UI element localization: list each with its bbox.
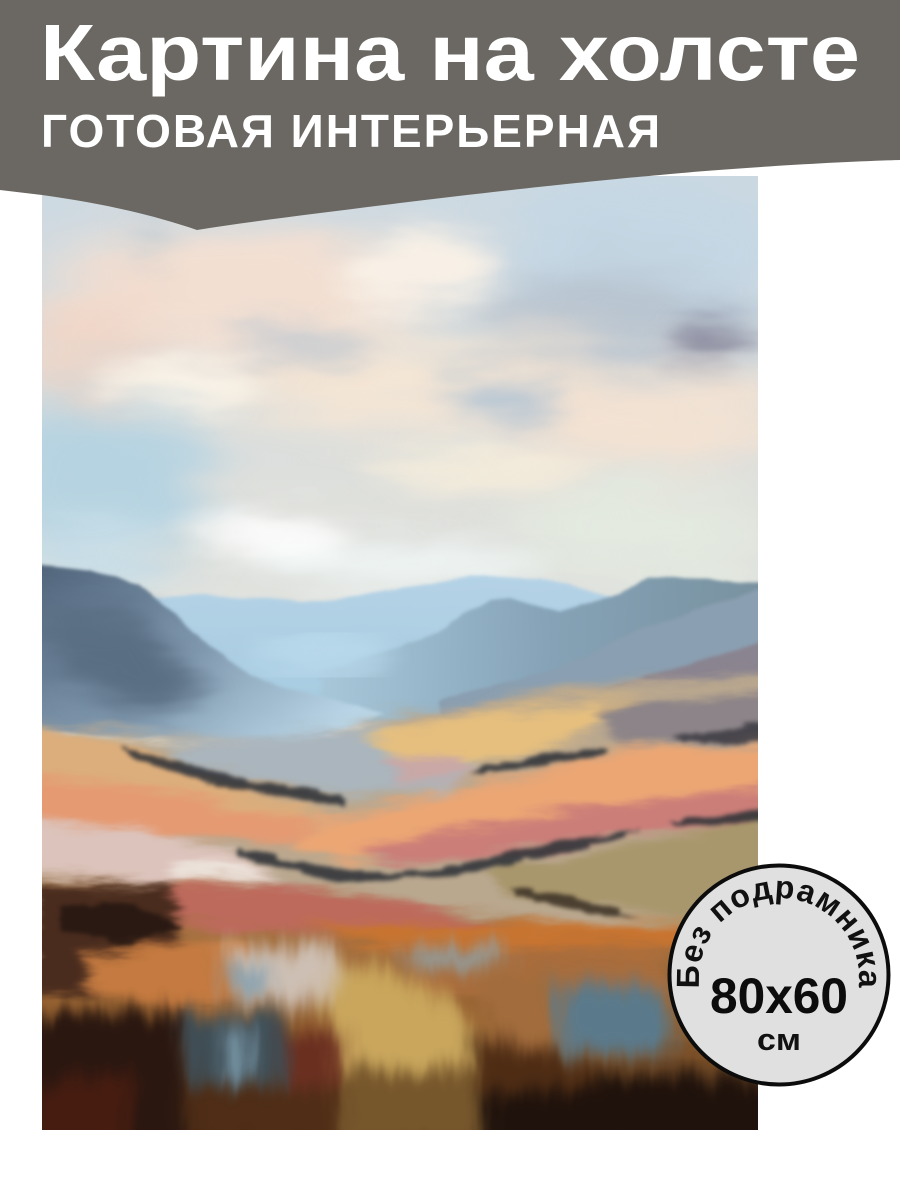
badge: size (668, 864, 890, 1086)
dark streaks (60, 722, 770, 945)
sky clouds (90, 231, 746, 585)
left mountain (30, 563, 385, 745)
badge arc text: Без подрамника (676, 880, 876, 988)
title: Картина на холсте (40, 8, 860, 97)
distant mountains (154, 574, 611, 698)
valley haze (250, 641, 390, 669)
badge size number: 80x60 (710, 968, 848, 1024)
mid fields (30, 670, 770, 1140)
sky colour masses (42, 196, 758, 590)
header banner (0, 0, 900, 230)
painting: mountain landscape (42, 176, 758, 1130)
badge unit: см (757, 1022, 801, 1057)
foreground (20, 945, 780, 1150)
subtitle: ГОТОВАЯ ИНТЕРЬЕРНАЯ (41, 105, 660, 157)
right mountains (323, 574, 758, 722)
